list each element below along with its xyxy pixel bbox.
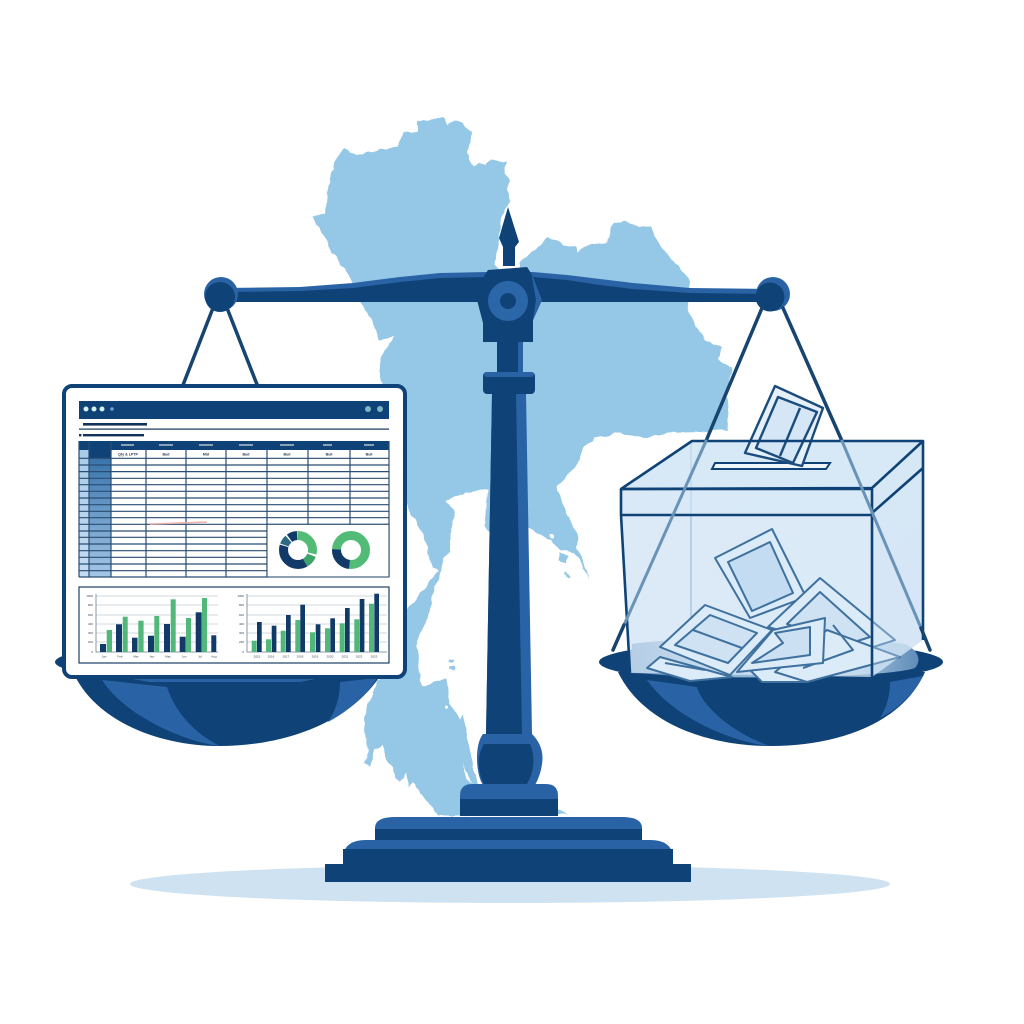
right pivot <box>756 277 790 312</box>
data table: Qty & LPTP <box>118 452 138 456</box>
chart axis labels: 200 <box>239 640 244 644</box>
ballot box back faces <box>621 441 923 677</box>
browser header bar <box>79 401 389 419</box>
box edges <box>621 441 923 677</box>
data table: Bull <box>366 452 372 456</box>
central column <box>483 340 535 734</box>
chart axis labels: 2022 <box>356 654 363 658</box>
data table: Bud <box>242 452 250 456</box>
ballot box <box>621 386 923 677</box>
chart axis labels: Mar <box>133 654 139 658</box>
data table <box>79 441 389 577</box>
chart axis labels <box>86 594 378 658</box>
left pan <box>55 642 385 746</box>
ballot: lower left sheet <box>647 657 732 681</box>
left panel: data dashboard <box>64 386 405 677</box>
chart axis labels: 800 <box>88 603 93 607</box>
finial <box>499 207 519 266</box>
ballot: back right sheet <box>768 578 895 652</box>
chart axis labels: 0 <box>242 650 244 654</box>
donut chart 2 <box>336 536 366 564</box>
scale beam <box>222 272 772 302</box>
chart axis labels: 2016 <box>268 654 275 658</box>
chart axis labels: Jun <box>182 654 187 658</box>
ballot being cast <box>745 386 823 466</box>
ballot: lower right sheet <box>775 625 900 682</box>
chart axis labels: 2017 <box>283 654 290 658</box>
chart axis labels: Jul <box>198 654 202 658</box>
pivot hub <box>477 267 542 342</box>
chart axis labels: 600 <box>88 613 93 617</box>
chart axis labels: 1000 <box>237 594 244 598</box>
left pivot and hanger <box>183 277 258 387</box>
pile of ballots <box>647 529 900 682</box>
chart axis labels: 300 <box>88 631 93 635</box>
ballot: front left sheet <box>660 605 772 675</box>
ballot: upright sheet <box>715 529 806 618</box>
chart axis labels: 1000 <box>86 594 93 598</box>
data table: Bud <box>284 452 290 456</box>
chart axis labels: 600 <box>239 613 244 617</box>
ground shadow <box>130 865 890 903</box>
chart axis labels: 2023 <box>371 654 378 658</box>
data table: Bull <box>326 452 332 456</box>
chart axis labels: Feb <box>117 654 123 658</box>
right pan <box>599 638 943 746</box>
map silhouette <box>312 118 732 815</box>
chart axis labels: 400 <box>239 622 244 626</box>
right bar chart <box>252 594 379 652</box>
ballot slot <box>712 463 830 469</box>
chart axis labels: Aug <box>211 654 217 658</box>
ballot: bottom sheets <box>750 664 805 682</box>
ballot: centre sheet <box>737 618 825 672</box>
chart axis labels: 2015 <box>254 654 261 658</box>
chart axis labels: 2021 <box>342 654 349 658</box>
chart axis labels: 2019 <box>312 654 319 658</box>
chart axis labels: Apr <box>150 654 154 658</box>
dashboard title lines <box>79 423 389 436</box>
gridlines <box>96 596 387 642</box>
chart axis labels: 2018 <box>297 654 304 658</box>
bar charts panel <box>79 587 389 663</box>
left bar chart <box>100 598 216 652</box>
chart axis labels: May <box>165 654 171 658</box>
chart axis labels: 400 <box>88 622 93 626</box>
chart axis labels: 2020 <box>327 654 334 658</box>
donut chart 1 <box>284 536 312 564</box>
data table: Mid <box>203 452 209 456</box>
dashboard frame <box>64 386 405 677</box>
column urn <box>477 734 543 785</box>
chart axis labels: 800 <box>239 603 244 607</box>
chart axis labels: Jan <box>102 654 107 658</box>
chart axis labels: 300 <box>239 631 244 635</box>
right hanger cords <box>613 308 930 650</box>
data table: Bud <box>162 452 170 456</box>
chart axis labels: 200 <box>88 640 93 644</box>
stepped base <box>325 784 691 882</box>
chart axis labels: 0 <box>91 650 93 654</box>
donut charts panel <box>267 524 389 577</box>
